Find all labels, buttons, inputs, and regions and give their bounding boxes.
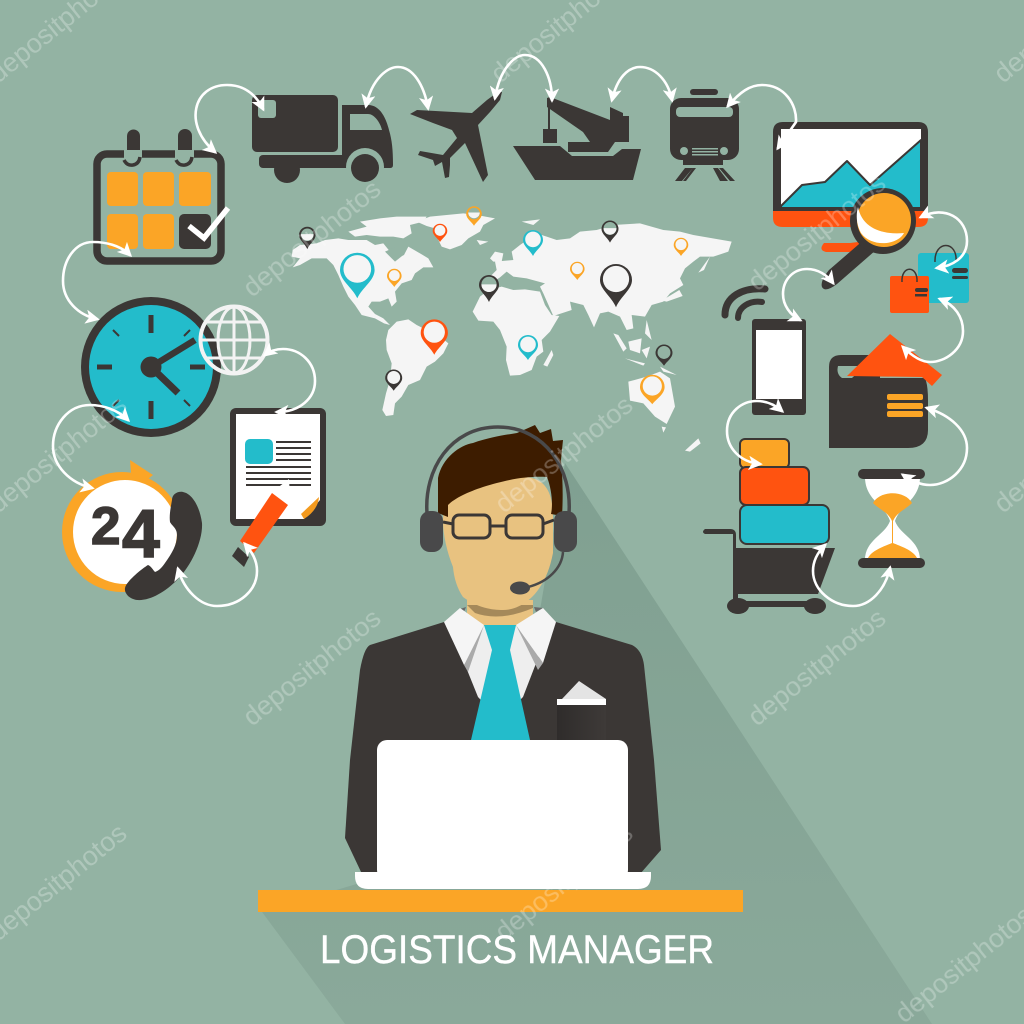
icon: cargo ship with crane — [513, 97, 641, 180]
icon: shopping bags — [890, 246, 969, 313]
arrow: phone to magnifier — [783, 269, 833, 320]
icon: luggage cart — [703, 439, 835, 614]
headset — [420, 427, 577, 594]
icon: wifi signal — [725, 289, 765, 318]
icon: document with pencil — [230, 408, 326, 567]
arrow: hourglass to cart — [813, 545, 890, 606]
arrow: train to monitor — [728, 85, 796, 148]
icon: train — [670, 89, 739, 181]
long shadow of manager — [262, 463, 932, 1024]
arrow: ship to train — [612, 67, 672, 100]
pocket with handkerchief — [557, 681, 606, 741]
watermarks: depositphotos — [237, 603, 386, 732]
number 24: 2 — [91, 497, 120, 556]
desk — [258, 890, 743, 912]
glasses — [443, 515, 554, 538]
telephone handset — [125, 492, 202, 600]
icon: magnifying glass — [822, 188, 916, 289]
icon: monitor with analytics chart — [773, 122, 928, 252]
icon: globe — [200, 306, 268, 374]
arrow: wallet to hourglass — [903, 408, 967, 485]
arrow: truck to plane — [366, 67, 428, 108]
arrow: phone to pencil — [178, 544, 257, 606]
watermarks: depositphotos — [742, 603, 891, 732]
watermarks: depositphotos — [489, 818, 638, 947]
manager figure — [345, 425, 661, 874]
collar right — [516, 608, 556, 663]
icon: 24-hour support — [62, 460, 202, 600]
necktie — [471, 625, 530, 740]
face — [443, 477, 553, 610]
jacket — [345, 622, 661, 874]
watermarks: depositphotos — [237, 174, 386, 303]
neck — [467, 600, 533, 628]
number 24: 4 — [122, 496, 160, 572]
arrow: document to globe — [265, 349, 315, 412]
arrow: bag to wallet — [903, 299, 963, 362]
icon: wallet with banknote — [829, 334, 942, 448]
title: LOGISTICS MANAGER — [320, 928, 714, 972]
watermarks: depositphotos — [489, 390, 638, 519]
watermarks: depositphotos — [742, 168, 891, 297]
icon: delivery truck — [252, 95, 393, 186]
arrow: calendar to truck — [196, 85, 263, 152]
icon: smartphone — [752, 319, 806, 415]
icon: airplane — [410, 92, 502, 182]
icon: wall clock — [81, 297, 221, 437]
arrow: clock to 24 — [53, 405, 128, 488]
connecting arrows — [53, 55, 967, 606]
arrow: plane to ship — [495, 55, 552, 100]
arrow: monitor to bag — [921, 212, 967, 268]
world map with location pins — [292, 206, 732, 452]
hair — [438, 425, 563, 517]
pins — [299, 206, 688, 404]
collar left — [444, 608, 484, 665]
laptop — [355, 740, 651, 889]
continents — [292, 213, 732, 452]
shirt — [455, 626, 545, 720]
arrow: luggage to phone — [727, 401, 782, 464]
arrow: calendar to clock — [63, 242, 130, 319]
icon: calendar — [97, 129, 228, 261]
icon: hourglass — [858, 469, 925, 568]
pencil — [232, 479, 290, 567]
